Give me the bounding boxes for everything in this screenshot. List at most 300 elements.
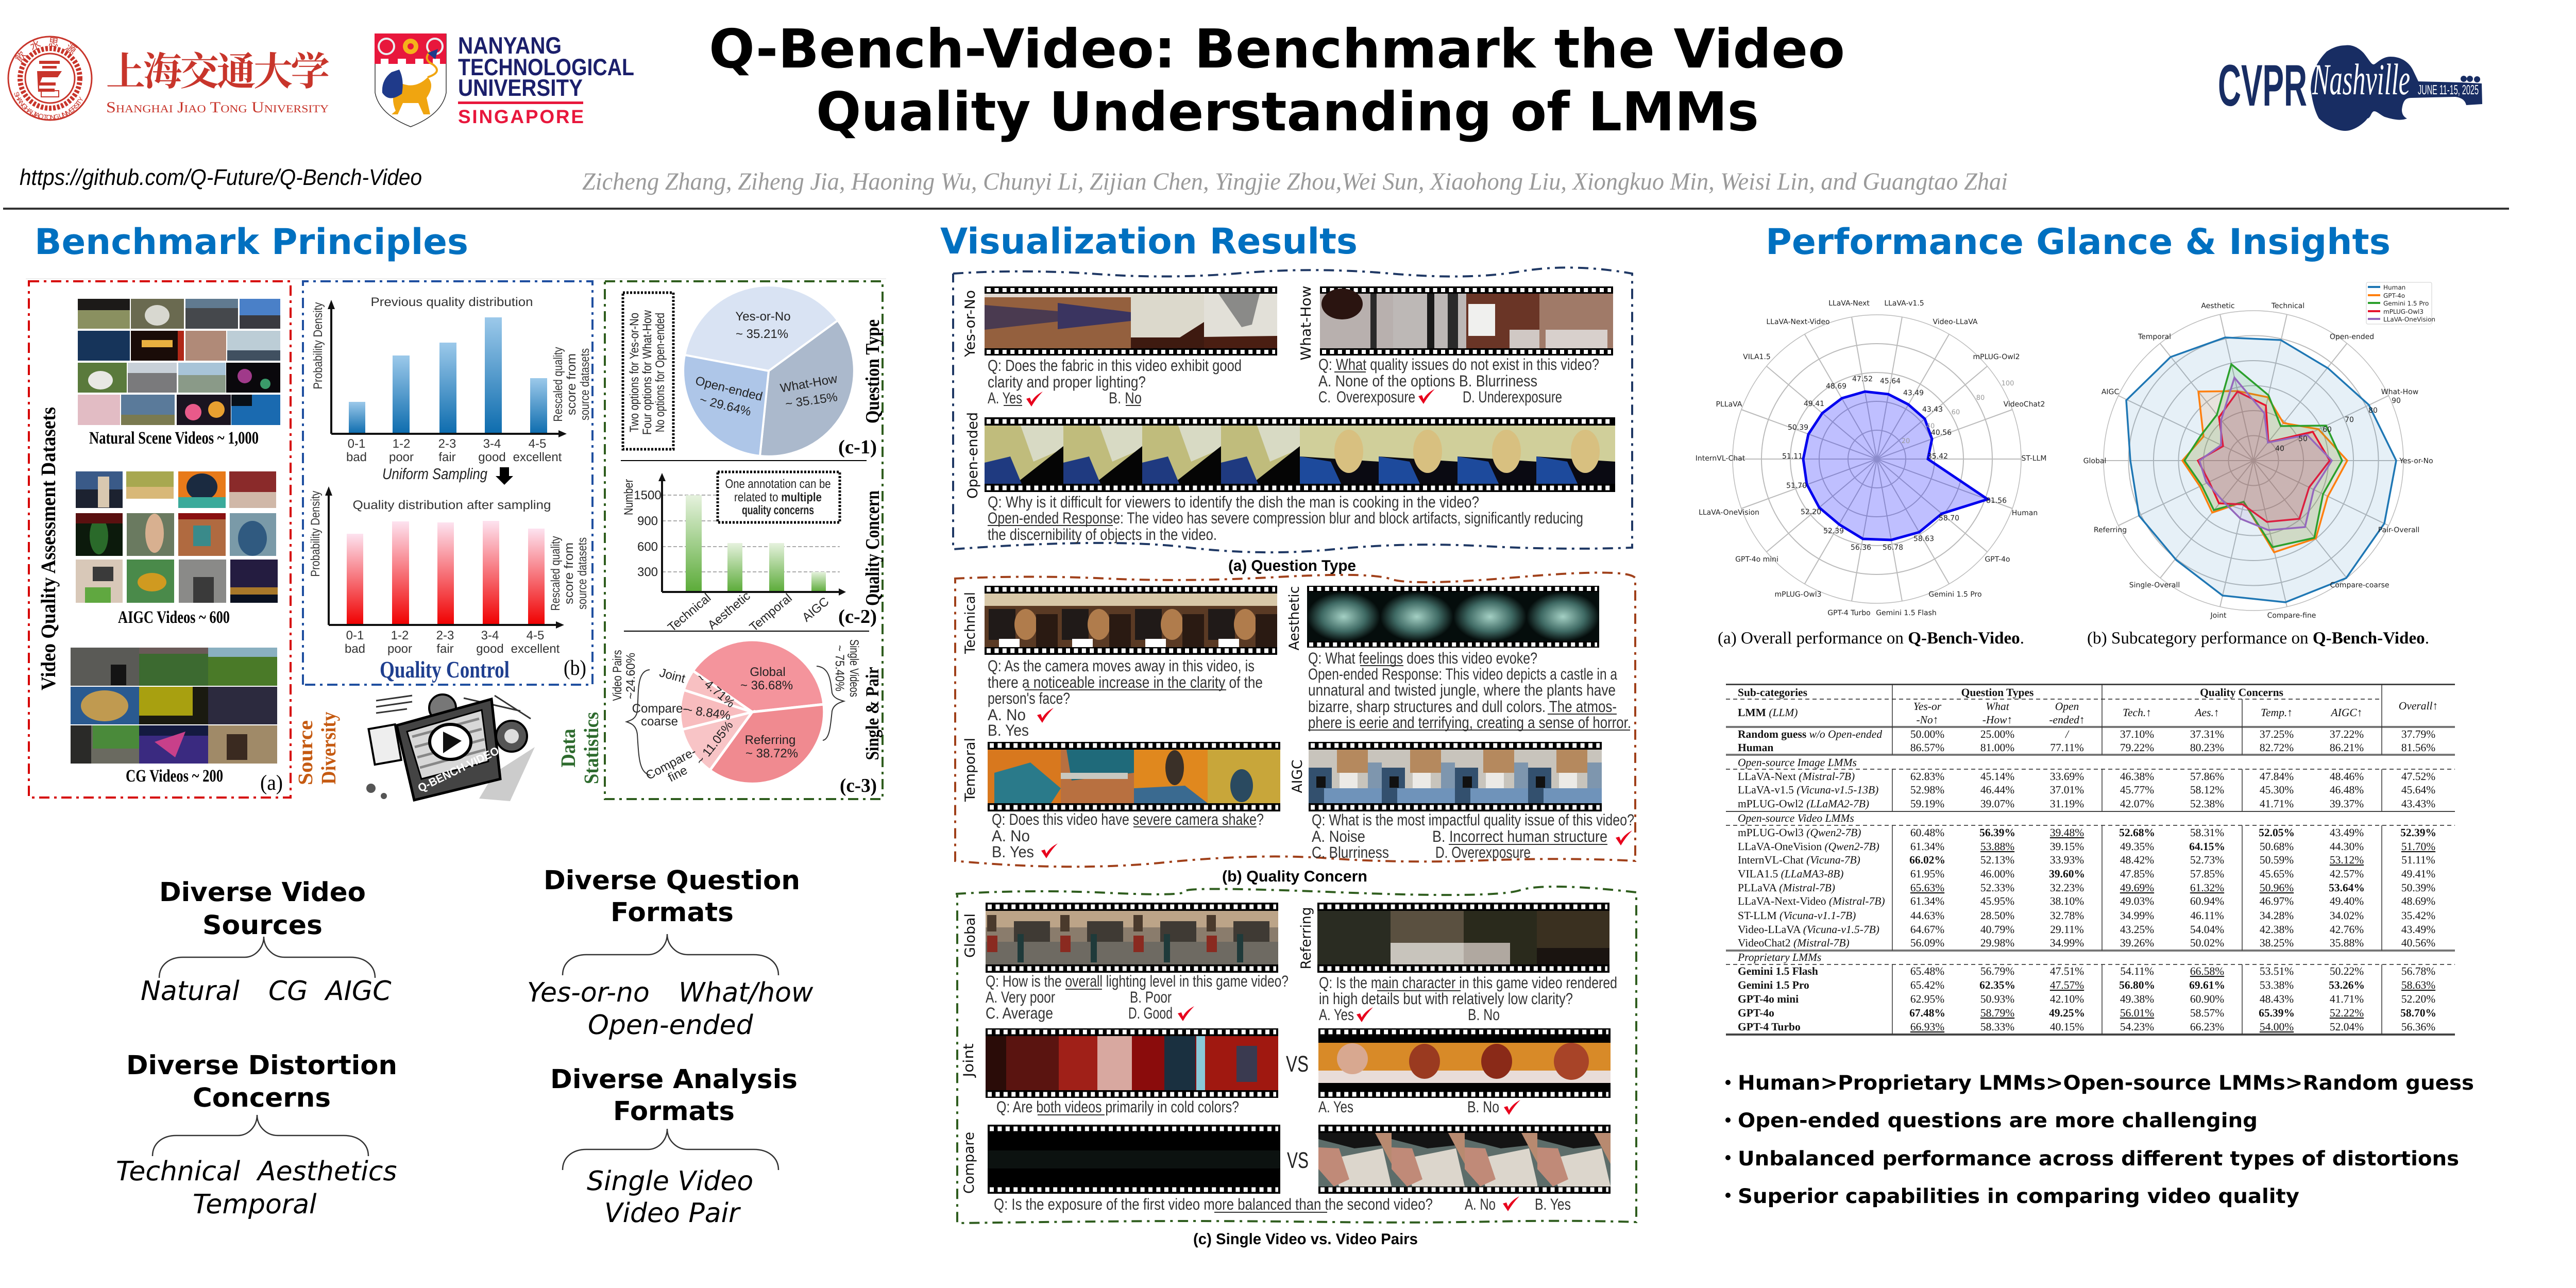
table rows: proprietary LMMs: 58.33% [1980, 1021, 2014, 1033]
table header: Quality Concerns [2200, 686, 2283, 699]
table rows: open-source video LMMs: 32.23% [2050, 882, 2084, 894]
bottom-left: diverse analysis formats: Single Video [587, 1166, 753, 1197]
chart: quality distribution after sampling [309, 486, 589, 656]
table rows: open-source video LMMs: 58.31% [2190, 826, 2224, 839]
bottom-left: diverse video sources: CG [268, 976, 308, 1007]
table rows: baselines: 81.00% [1980, 741, 2014, 754]
pie chart: single vs pair: ~ 11.05% [693, 719, 736, 768]
sample: Referring: B. No [1468, 1006, 1500, 1024]
sample: Compare: Q: Is the exposure of the first video more balanced than the second video? [994, 1195, 1433, 1213]
table rows: baselines: Random guess w/o Open-ended [1738, 728, 1882, 740]
table rows: proprietary LMMs: 52.20% [2401, 993, 2435, 1005]
tag (b): (b) [564, 656, 586, 680]
table rows: proprietary LMMs: 66.58% [2190, 965, 2224, 977]
callout: multiple quality concerns: related to multiple [734, 490, 822, 504]
sample: Temporal [962, 738, 1280, 861]
question type note [623, 293, 673, 449]
header: logo Nanyang Technological University: NANYANG [458, 32, 562, 59]
radar chart: subcategory performance: 60 [2323, 426, 2332, 434]
radar chart: overall performance: VILA1.5 [1743, 353, 1771, 361]
table rows: proprietary LMMs: 54.00% [2260, 1021, 2294, 1033]
table rows: open-source video LMMs: 40.56% [2401, 937, 2435, 949]
table rows: open-source video LMMs: 29.11% [2050, 923, 2084, 936]
sample: Joint: Q: Are both videos primarily in cold colors? [996, 1098, 1239, 1116]
sample: Aesthetic: Q: What feelings does this video evoke? [1308, 649, 1537, 667]
radar chart: subcategory performance: Technical [2271, 302, 2304, 310]
table rows: open-source video LMMs: PLLaVA (Mistral-7B) [1738, 882, 1835, 894]
labels and braces: pie categories: Compare- [643, 744, 699, 783]
label: Source Diversity: Diversity [317, 712, 340, 784]
table rows: proprietary LMMs: 58.79% [1980, 1007, 2014, 1019]
bottom-left: diverse question formats: Open-ended [588, 1010, 754, 1041]
bottom-left: diverse question formats: What/how [679, 977, 814, 1008]
radar chart: overall performance: 40 [1926, 422, 1935, 430]
chart: previous quality distribution: 0-1 [348, 437, 365, 451]
chart: quality distribution after sampling: source datasets [575, 537, 589, 609]
table rows: open-source image LMMs: 48.46% [2330, 770, 2364, 783]
sample: Yes-or-No: A. Yes [988, 389, 1022, 407]
bar chart: quality concern: AIGC [800, 595, 832, 624]
sample: Temporal: Q: Does this video have severe camera shake? [992, 810, 1264, 828]
table rows: proprietary LMMs: 48.43% [2260, 993, 2294, 1005]
table rows: open-source video LMMs: 43.49% [2401, 923, 2435, 936]
radar chart: overall performance: ST-LLM [2022, 454, 2046, 463]
header: logo Shanghai Jiao Tong University [7, 36, 330, 121]
label: Quality Control: Quality Control [380, 656, 510, 683]
table rows: open-source video LMMs: 29.98% [1980, 937, 2014, 949]
panel: (b) Quality Concern examples [954, 572, 1635, 867]
icon: Q-Bench-Video sketch [366, 694, 535, 801]
table rows: open-source video LMMs: 44.30% [2330, 840, 2364, 853]
title: Quality Understanding of LMMs [816, 80, 1759, 143]
radar chart: subcategory performance: Referring [2094, 526, 2127, 534]
pie chart: single vs pair: Referring [745, 733, 795, 747]
CG thumbnails [71, 648, 277, 764]
table rows: proprietary LMMs: 49.38% [2120, 993, 2154, 1005]
table rows: proprietary LMMs: 58.63% [2401, 979, 2435, 991]
chart: quality distribution after sampling: excellent [511, 642, 560, 656]
table rows: baselines: 25.00% [1980, 728, 2014, 740]
bottom-left: diverse video sources: Natural [141, 976, 240, 1007]
header: logo Nanyang Technological University [375, 32, 634, 127]
table rows: open-source video LMMs: 46.11% [2190, 909, 2224, 922]
table rows: open-source image LMMs: 45.14% [1980, 770, 2014, 783]
table rows: open-source video LMMs: VILA1.5 (LLaMA3-8B) [1738, 868, 1843, 880]
table rows: open-source video LMMs: 42.57% [2330, 868, 2364, 880]
pie chart: question type: Open-ended [694, 374, 764, 404]
chart: previous quality distribution: Rescaled quality [551, 347, 565, 421]
table rows: open-source image LMMs: 52.98% [1910, 784, 1944, 796]
table rows: proprietary LMMs: GPT-4o mini [1738, 993, 1799, 1005]
sample: Compare: B. Yes [1535, 1195, 1571, 1213]
insights list: Open-ended questions are more challenging [1738, 1109, 2258, 1132]
insights list: Human>Proprietary LMMs>Open-source LMMs>Random guess [1738, 1072, 2474, 1095]
natural scene thumbnails [78, 299, 280, 425]
table rows: open-source video LMMs: mPLUG-Owl3 (Qwen2-7B) [1738, 826, 1861, 839]
table rows: open-source video LMMs: 56.39% [1979, 826, 2015, 839]
header: logo Shanghai Jiao Tong University: Shanghai Jiao Tong University [106, 99, 329, 116]
labels and braces: pie categories: coarse [641, 715, 678, 728]
sample: Aesthetic [1286, 586, 1631, 732]
sample: Global [962, 903, 1289, 1022]
callout: multiple quality concerns [718, 472, 840, 522]
radar chart: subcategory performance: Single-Overall [2129, 581, 2180, 589]
radar chart: subcategory performance: What-How [2381, 388, 2418, 396]
label: Source Diversity: Source [294, 720, 317, 785]
chart: previous quality distribution: Probability Density [311, 302, 325, 389]
radar chart: subcategory performance: 40 [2275, 445, 2284, 453]
table rows: open-source image LMMs: LLaVA-v1.5 (Vicuna-v1.5-13B) [1738, 784, 1878, 796]
table rows: open-source video LMMs: 52.05% [2259, 826, 2295, 839]
radar chart: overall performance: LLaVA-v1.5 [1884, 299, 1924, 308]
radar chart: overall performance: LLaVA-Next-Video [1766, 318, 1830, 326]
table rows: open-source video LMMs: 47.85% [2120, 868, 2154, 880]
table rows: proprietary LMMs: 65.48% [1910, 965, 1944, 977]
table rows: open-source image LMMs: 62.83% [1910, 770, 1944, 783]
table rows: proprietary LMMs: 56.36% [2401, 1021, 2435, 1033]
table rows: proprietary LMMs: 53.51% [2260, 965, 2294, 977]
table rows: open-source video LMMs: 32.78% [2050, 909, 2084, 922]
chart: previous quality distribution: score from [565, 353, 579, 415]
labels and braces: pie categories: Joint [658, 666, 687, 686]
bottom-left: diverse video sources: AIGC [324, 976, 392, 1007]
header: logo Nanyang Technological University: TECHNOLOGICAL [458, 54, 634, 80]
sample: Global: A. Very poor [986, 988, 1055, 1006]
table rows: open-source video LMMs: 50.02% [2190, 937, 2224, 949]
table rows: open-source video LMMs: Video-LLaVA (Vicuna-v1.5-7B) [1738, 923, 1879, 936]
radar chart: overall performance: GPT-4o [1985, 555, 2010, 564]
table rows: baselines: / [2065, 728, 2070, 740]
table rows: proprietary LMMs: 49.25% [2049, 1007, 2085, 1019]
table header: LMM (LLM) [1738, 706, 1798, 719]
chart: quality distribution after sampling: 4-5 [527, 629, 544, 642]
header: logo Shanghai Jiao Tong University: SHANGHAI JIAO TONG UNIVERSITY [14, 92, 83, 120]
label: Data Statistics: Statistics [580, 712, 603, 784]
table rows: open-source video LMMs: 42.76% [2330, 923, 2364, 936]
table rows: proprietary LMMs: Gemini 1.5 Flash [1738, 965, 1818, 977]
table header: AIGC↑ [2330, 706, 2362, 719]
chart: previous quality distribution: poor [389, 450, 414, 464]
chart: quality distribution after sampling: 3-4 [481, 629, 499, 642]
sample: Referring: in high details but with relatively low clarity? [1319, 990, 1573, 1008]
radar chart: subcategory performance: AIGC [2102, 388, 2119, 396]
radar chart: overall performance: 58.70 [1939, 514, 1959, 522]
table rows: open-source video LMMs: VideoChat2 (Mistral-7B) [1738, 937, 1850, 949]
table rows: proprietary LMMs: 42.10% [2050, 993, 2084, 1005]
labels and braces: pie categories [611, 639, 861, 785]
bar chart: quality concern: Temporal [747, 591, 795, 634]
table rows: open-source video LMMs [1738, 812, 2436, 949]
table rows: open-source video LMMs: 52.73% [2190, 854, 2224, 866]
caption: overall performance: (a) Overall performance on Q-Bench-Video. [1718, 629, 2024, 648]
table rows: open-source video LMMs: 61.32% [2190, 882, 2224, 894]
bottom-left: diverse analysis formats [550, 1064, 798, 1229]
chart: quality distribution after sampling: bad [345, 642, 365, 656]
sample: Global: C. Average [986, 1004, 1053, 1022]
bottom-left: diverse question formats: Yes-or-no [527, 977, 650, 1008]
bottom-left: diverse distortion concerns: Diverse Distortion [126, 1050, 397, 1081]
radar chart: subcategory performance: 80 [2368, 406, 2378, 415]
table rows: open-source image LMMs: 45.64% [2401, 784, 2435, 796]
table rows: proprietary LMMs: 54.11% [2120, 965, 2154, 977]
table rows: baselines: 86.57% [1910, 741, 1944, 754]
table rows: open-source video LMMs: 49.40% [2330, 895, 2364, 907]
sample: Open-ended: Open-ended [965, 412, 981, 499]
sample: Open-ended [965, 412, 1615, 544]
table rows: baselines: 37.31% [2190, 728, 2224, 740]
table rows: open-source image LMMs: Open-source Image LMMs [1738, 756, 1857, 769]
table rows: open-source video LMMs: 52.68% [2119, 826, 2155, 839]
table rows: open-source video LMMs: 52.13% [1980, 854, 2014, 866]
sample: What-How: Overexposure [1336, 388, 1415, 406]
table rows: baselines: 82.72% [2260, 741, 2294, 754]
bottom-left: diverse distortion concerns: Temporal [193, 1189, 317, 1220]
question type note: No options for Open-ended [653, 313, 667, 432]
bottom-left: diverse video sources [141, 877, 392, 1007]
radar chart: overall performance: Video-LLaVA [1933, 318, 1978, 326]
table rows: proprietary LMMs: Gemini 1.5 Pro [1738, 979, 1809, 991]
bottom-left: diverse question formats: Diverse Question [544, 866, 800, 896]
bottom-left: diverse distortion concerns [116, 1050, 397, 1220]
table rows: open-source image LMMs: 57.86% [2190, 770, 2224, 783]
caption: (c) Single Video vs. Video Pairs: (c) Single Video vs. Video Pairs [1193, 1231, 1418, 1248]
table rows: proprietary LMMs: 50.22% [2330, 965, 2364, 977]
table rows: open-source video LMMs: 50.96% [2260, 882, 2294, 894]
pie chart: single vs pair: ~ 4.71% [693, 670, 737, 710]
table rows: open-source video LMMs: 49.03% [2120, 895, 2154, 907]
radar chart: overall performance: 51.70 [1786, 482, 1807, 490]
table rows: open-source video LMMs: 42.38% [2260, 923, 2294, 936]
table header: What [1986, 700, 2010, 713]
radar chart: overall performance: Human [2012, 509, 2038, 517]
table rows: proprietary LMMs: 53.26% [2329, 979, 2365, 991]
chart: quality distribution after sampling: Quality distribution after sampling [352, 498, 551, 512]
sample: Yes-or-No: Yes-or-No [962, 290, 978, 358]
pie chart: single vs pair: ~ 38.72% [745, 747, 798, 760]
radar chart: overall performance: 60 [1952, 409, 1960, 416]
table: benchmark results [1726, 684, 2455, 1036]
table rows: open-source image LMMs: 43.43% [2401, 798, 2435, 810]
table rows: open-source video LMMs: 52.33% [1980, 882, 2014, 894]
table rows: open-source video LMMs: 61.95% [1910, 868, 1944, 880]
table header: Aes.↑ [2194, 706, 2219, 719]
table rows: open-source video LMMs: ST-LLM (Vicuna-v1.1-7B) [1738, 909, 1856, 922]
vertical label: Video Quality Assessment Datasets: Video Quality Assessment Datasets [37, 407, 60, 690]
table rows: proprietary LMMs: 41.71% [2330, 993, 2364, 1005]
radar chart: overall performance: 48.69 [1826, 382, 1846, 391]
caption: Natural Scene Videos: Natural Scene Videos ~ 1,000 [89, 429, 259, 448]
chart legend: Gemini 1.5 Pro [2383, 300, 2429, 307]
header: logo Nanyang Technological University: SINGAPORE [458, 106, 584, 127]
radar chart: subcategory performance: Temporal [2138, 333, 2171, 341]
sample: Aesthetic: Open-ended Response: This video depicts a castle in a [1308, 665, 1618, 683]
label: Question Type: Question Type [862, 319, 884, 423]
table rows: proprietary LMMs: GPT-4 Turbo [1738, 1021, 1801, 1033]
sample: Temporal: A. No [992, 827, 1030, 845]
chart legend: GPT-4o [2383, 292, 2405, 299]
table rows: open-source video LMMs: 46.00% [1980, 868, 2014, 880]
sample: Technical: person's face? [988, 689, 1070, 707]
table rows: open-source video LMMs: 61.34% [1910, 895, 1944, 907]
header: logo Shanghai Jiao Tong University: 飲水思源 [15, 37, 77, 63]
radar chart: overall performance: 52.39 [1823, 527, 1844, 535]
bar chart: quality concern [622, 473, 846, 635]
table rows: open-source video LMMs: 44.63% [1910, 909, 1944, 922]
sample: Aesthetic: Aesthetic [1286, 586, 1302, 650]
chart: previous quality distribution: bad [346, 450, 367, 464]
table rows: open-source video LMMs: 50.68% [2260, 840, 2294, 853]
chart: previous quality distribution: source datasets [578, 348, 592, 420]
chart: quality distribution after sampling: 0-1 [346, 629, 364, 642]
radar chart: overall performance: GPT-4 Turbo [1827, 609, 1871, 617]
radar chart: overall performance: InternVL-Chat [1696, 454, 1745, 463]
radar chart: subcategory performance: Aesthetic [2201, 302, 2235, 310]
table rows: proprietary LMMs: 50.93% [1980, 993, 2014, 1005]
table rows: proprietary LMMs: 56.79% [1980, 965, 2014, 977]
heading: Benchmark Principles: Benchmark Principles [35, 222, 468, 263]
table rows: open-source video LMMs: 43.49% [2330, 826, 2364, 839]
caption: AIGC Videos: AIGC Videos ~ 600 [118, 608, 230, 627]
table rows: open-source video LMMs: 45.95% [1980, 895, 2014, 907]
table rows: baselines: 50.00% [1910, 728, 1944, 740]
authors: Zicheng Zhang, Ziheng Jia, Haoning Wu, Chunyi Li, Zijian Chen, Yingjie Zhou,Wei Sun, Xiaohong Liu, Xiongkuo Min, Weisi Lin, and Guangtao Zhai [582, 168, 2008, 195]
radar chart: overall performance: 56.36 [1851, 544, 1871, 552]
table rows: open-source video LMMs: 39.48% [2050, 826, 2084, 839]
table rows: open-source video LMMs: 39.15% [2050, 840, 2084, 853]
table rows: open-source video LMMs: Open-source Video LMMs [1738, 812, 1854, 824]
label: Source Diversity [294, 712, 340, 785]
sample: AIGC: A. Noise [1312, 827, 1365, 845]
radar chart: overall performance: 45.64 [1880, 377, 1901, 385]
radar chart: subcategory performance: Global [2083, 457, 2106, 465]
radar chart: overall performance: GPT-4o mini [1735, 555, 1778, 564]
bottom-left: diverse analysis formats: Diverse Analysis [550, 1064, 798, 1095]
radar chart: overall performance: LLaVA-Next [1828, 299, 1870, 308]
callout: multiple quality concerns: One annotation can be [725, 477, 831, 491]
table rows: open-source video LMMs: 49.35% [2120, 840, 2154, 853]
header: CVPR Nashville logo: JUNE 11-15, 2025 [2418, 82, 2479, 97]
title [709, 18, 1845, 143]
chart: quality distribution after sampling: Rescaled quality [549, 536, 563, 611]
chart: previous quality distribution [311, 295, 592, 464]
callout: multiple quality concerns: quality concerns [742, 503, 814, 517]
pie chart: single vs pair: ~ 36.68% [740, 679, 793, 692]
table rows: open-source video LMMs: 53.64% [2329, 882, 2365, 894]
panel (a): video quality assessment datasets [29, 281, 291, 798]
sample: Temporal: Temporal [962, 738, 978, 802]
radar chart: overall performance: mPLUG-Owl2 [1973, 353, 2020, 361]
caption: CG Videos: CG Videos ~ 200 [126, 767, 223, 786]
table rows: open-source video LMMs: 48.69% [2401, 895, 2435, 907]
table rows: open-source video LMMs: 39.60% [2049, 868, 2085, 880]
pie chart: single vs pair: ~ 8.84% [684, 703, 732, 723]
caption: (a) Question Type: (a) Question Type [1228, 557, 1356, 574]
bar chart: quality concern: 900 [637, 514, 658, 528]
radar chart: overall performance: 49.41 [1804, 400, 1824, 408]
radar chart: overall performance: VideoChat2 [2004, 400, 2045, 409]
table rows: open-source video LMMs: 52.39% [2400, 826, 2436, 839]
chart legend: Human [2383, 284, 2405, 291]
chart: previous quality distribution: 4-5 [529, 437, 546, 451]
table rows: open-source video LMMs: LLaVA-OneVision (Qwen2-7B) [1738, 840, 1879, 853]
labels and braces: pie categories: Video Pairs [611, 650, 624, 701]
panel: (c) Single Video vs. Video Pairs examples [956, 887, 1636, 1223]
chart: quality distribution after sampling: 2-3 [436, 629, 454, 642]
table rows: open-source video LMMs: 51.11% [2401, 854, 2435, 866]
table rows: open-source image LMMs: LLaVA-Next (Mistral-7B) [1738, 770, 1855, 783]
table rows: open-source video LMMs: 60.48% [1910, 826, 1944, 839]
table rows: open-source video LMMs: InternVL-Chat (Vicuna-7B) [1738, 854, 1860, 866]
radar chart: subcategory performance: Pair-Overall [2378, 526, 2419, 534]
radar chart: subcategory performance: Compare-coarse [2330, 581, 2389, 589]
sample: Technical: Q: As the camera moves away in this video, is [988, 657, 1255, 675]
table rows: proprietary LMMs: Proprietary LMMs [1737, 951, 1821, 963]
table rows: proprietary LMMs: 47.51% [2050, 965, 2084, 977]
radar chart: subcategory performance: Open-ended [2330, 333, 2374, 341]
table rows: open-source video LMMs: 66.02% [1909, 854, 1945, 866]
pie chart: question type: Yes-or-No [735, 310, 791, 324]
table rows: open-source image LMMs: mPLUG-Owl2 (LLaMA2-7B) [1738, 798, 1869, 810]
bar chart: quality concern: Technical [665, 591, 714, 635]
labels and braces: pie categories: Compare- [632, 702, 687, 716]
sample: Referring: Q: Is the main character in this game video rendered [1319, 974, 1617, 992]
sample: Open-ended: Open-ended Response: The video has severe compression blur and block artifacts, significantly reducing [988, 509, 1583, 527]
chart: previous quality distribution: 3-4 [483, 437, 501, 451]
table rows: open-source image LMMs: 37.01% [2050, 784, 2084, 796]
radar chart: overall performance: LLaVA-OneVision [1699, 509, 1759, 517]
header: CVPR Nashville logo [2218, 45, 2482, 131]
pie chart: question type: ~ 29.64% [698, 393, 753, 419]
bottom-left: diverse distortion concerns: Technical [116, 1156, 241, 1187]
radar chart: subcategory performance: 90 [2392, 397, 2401, 405]
sample: Global: Global [962, 913, 978, 958]
sample: Joint: VS [1286, 1052, 1309, 1077]
table rows: open-source image LMMs: 31.19% [2050, 798, 2084, 810]
table rows: open-source video LMMs: 54.04% [2190, 923, 2224, 936]
sample: Open-ended: Q: Why is it difficult for viewers to identify the dish the man is cooking in the video? [988, 493, 1479, 511]
label: Quality Concern: Quality Concern [862, 490, 884, 606]
radar chart: overall performance: mPLUG-Owl3 [1774, 590, 1822, 599]
chart: quality distribution after sampling: 1-2 [391, 629, 409, 642]
repository link: https://github.com/Q-Future/Q-Bench-Video [20, 165, 422, 190]
table header: -How↑ [1982, 714, 2012, 726]
sample: Technical: Technical [962, 592, 978, 654]
sample: Technical: A. No [988, 706, 1026, 724]
sample: Yes-or-No [962, 286, 1277, 407]
table rows: proprietary LMMs [1737, 951, 2436, 1033]
chart: previous quality distribution: 2-3 [438, 437, 456, 451]
tag (a): (a) [260, 771, 283, 795]
insights list: Superior capabilities in comparing video quality [1738, 1185, 2299, 1208]
sample: What-How: What-How [1298, 285, 1314, 361]
table rows: open-source video LMMs: 34.02% [2330, 909, 2364, 922]
table rows: proprietary LMMs: 40.15% [2050, 1021, 2084, 1033]
sample: Temporal: B. Yes [992, 843, 1034, 861]
label: Data Statistics: Data [556, 728, 580, 768]
table header: -ended↑ [2049, 714, 2085, 726]
tag (c-2): (c-2) [838, 606, 877, 628]
radar chart: overall performance: Gemini 1.5 Pro [1928, 590, 1982, 599]
sample: Yes-or-No: Q: Does the fabric in this video exhibit good [988, 357, 1242, 375]
radar chart: overall performance: 81.56 [1986, 497, 2007, 505]
table rows: proprietary LMMs: 52.04% [2330, 1021, 2364, 1033]
bar chart: quality concern: 600 [637, 540, 658, 554]
sample: Open-ended: the discernibility of objects in the video. [988, 526, 1217, 544]
table rows: open-source video LMMs: 61.34% [1910, 840, 1944, 853]
table rows: baselines: 86.21% [2330, 741, 2364, 754]
sample: Joint: Joint [961, 1044, 977, 1078]
panel (c): data statistics [605, 281, 884, 799]
